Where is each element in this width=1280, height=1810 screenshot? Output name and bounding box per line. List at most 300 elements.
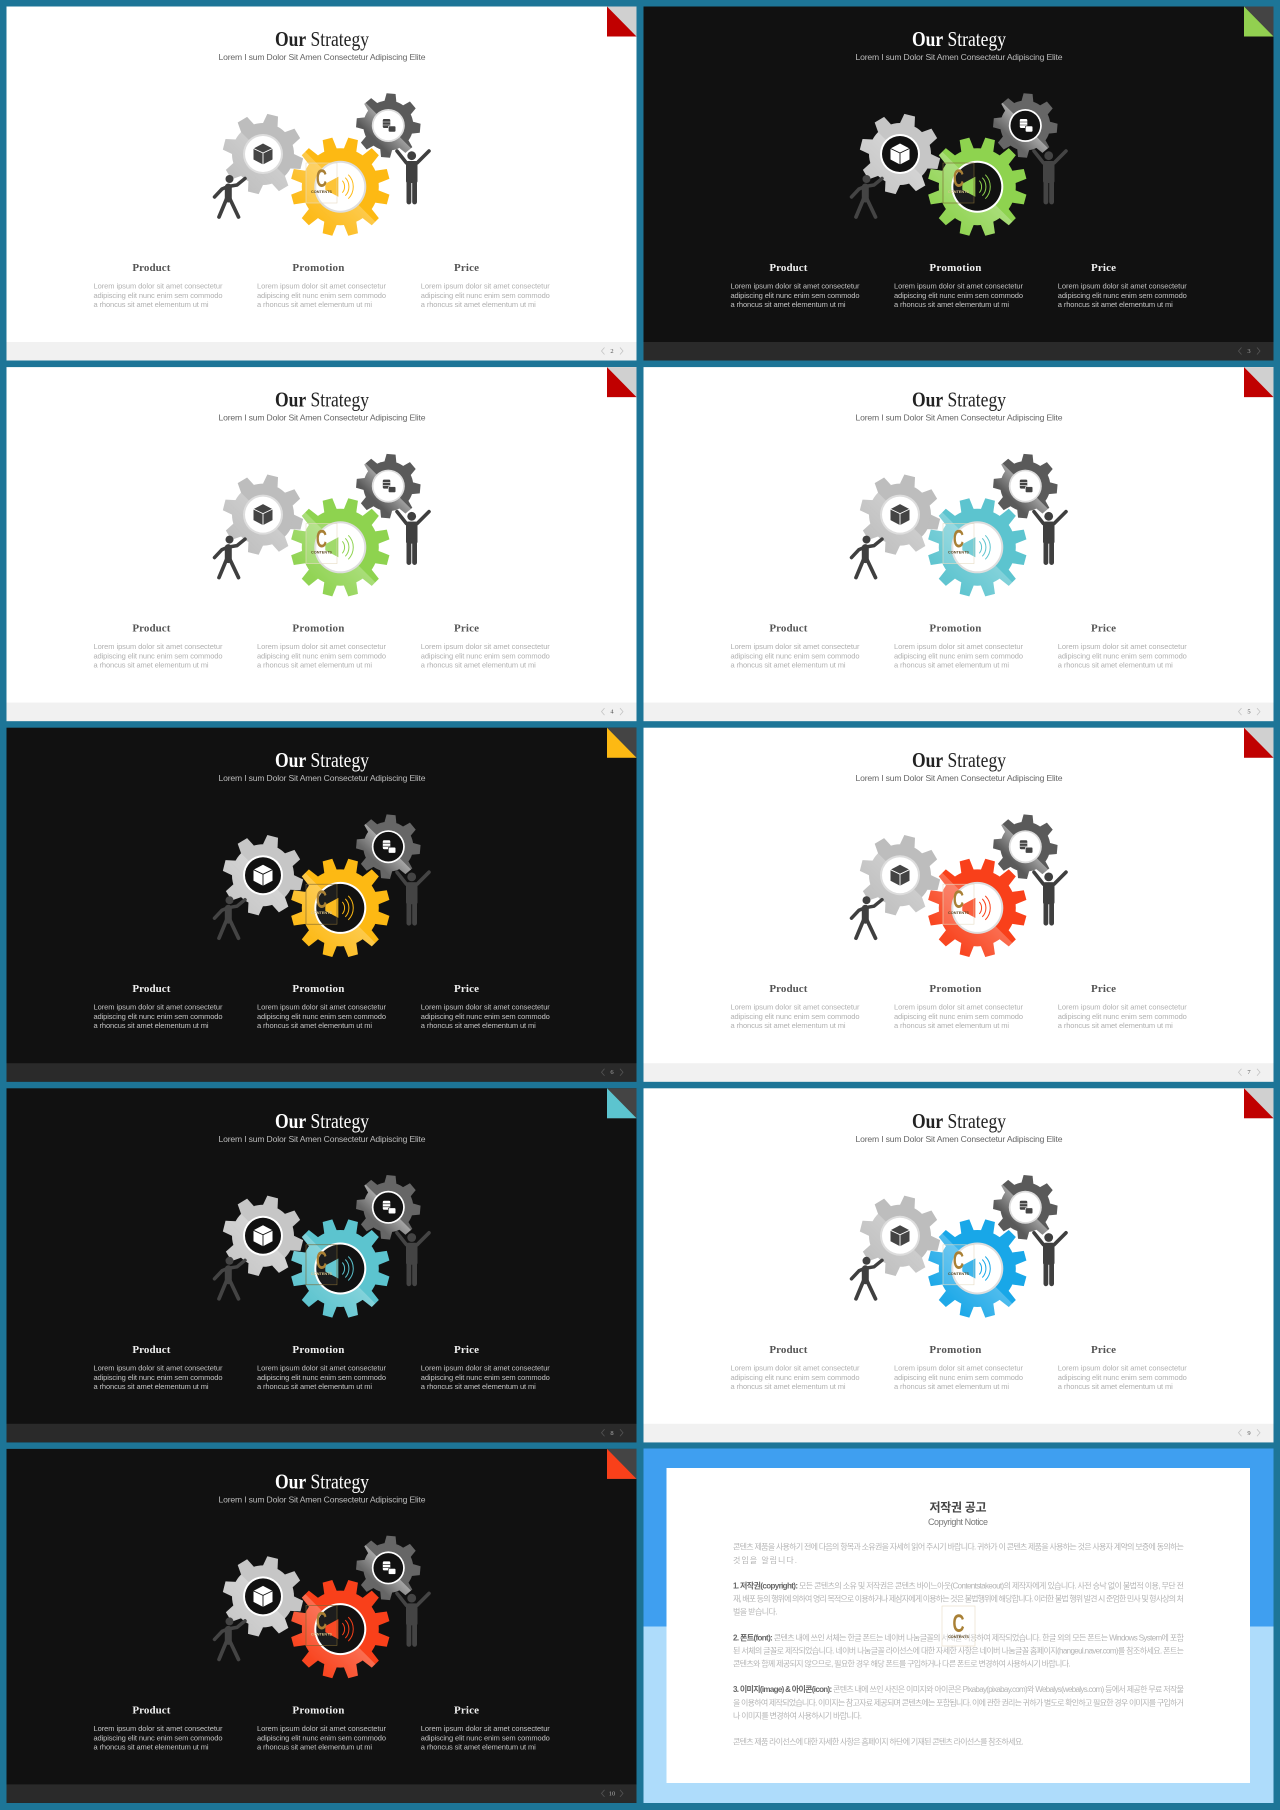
gear illustration	[845, 802, 1070, 963]
gear: price	[343, 80, 433, 170]
background blue top	[644, 1448, 1274, 1626]
panel: slide 4 white green	[6, 367, 636, 721]
column: promotion: adipiscing elit nunc enim sem commodo	[257, 1733, 386, 1742]
title: Our Strategy	[912, 1109, 1006, 1133]
panel: slide 3 dark green	[644, 6, 1274, 360]
column: product	[94, 623, 223, 670]
column: promotion: Promotion	[292, 262, 344, 274]
column: promotion: adipiscing elit nunc enim sem commodo	[894, 291, 1023, 300]
page number: 4	[610, 709, 614, 716]
person left	[852, 536, 882, 578]
column: price: adipiscing elit nunc enim sem commodo	[421, 291, 550, 300]
column: promotion: Lorem ipsum dolor sit amet consectetur	[257, 1003, 386, 1012]
column: price	[421, 262, 550, 309]
column: promotion: a rhoncus sit amet elementum ut mi	[894, 1382, 1009, 1391]
notice section 2: 2. 폰트(font): 콘텐츠 내에 쓰인 서체는 한글 폰트는 네이버 나눔글꼴의 서체를 이용하여 제작되었습니다. 한글 외의 모든 폰트는 Windows System에 포함	[733, 1632, 1185, 1642]
slide background	[6, 1449, 636, 1803]
slide background	[6, 1088, 636, 1442]
column: promotion: a rhoncus sit amet elementum ut mi	[257, 661, 372, 670]
column: price: adipiscing elit nunc enim sem commodo	[1058, 291, 1187, 300]
notice section 2: 된 서체의 글꼴로 제작되었습니다. 네이버 나눔글꼴 라이선스에 대한 자세한 사항은 네이버 나눔글꼴 홈페이지(hangeul.naver.com)를 참조하세요. 폰트는	[733, 1646, 1184, 1656]
watermark: CONTENTS	[948, 911, 969, 915]
corner fold	[1244, 6, 1274, 36]
notice intro	[733, 1542, 1184, 1565]
column: product: Lorem ipsum dolor sit amet consectetur	[730, 1003, 860, 1012]
column: product: Product	[132, 1704, 171, 1716]
column: product: Product	[132, 623, 171, 635]
watermark: C	[953, 165, 964, 193]
watermark: CONTENTS	[311, 1632, 332, 1636]
gear illustration	[208, 80, 433, 242]
notice section 1	[733, 1580, 1184, 1616]
gear: product	[845, 460, 955, 570]
column: price: adipiscing elit nunc enim sem commodo	[1058, 1012, 1187, 1021]
watermark: C	[953, 526, 964, 554]
panel: slide 8 dark teal	[6, 1088, 636, 1442]
column: price: adipiscing elit nunc enim sem commodo	[421, 1373, 550, 1382]
watermark	[306, 1245, 337, 1285]
footer bar	[6, 1784, 636, 1803]
subtitle: Lorem I sum Dolor Sit Amen Consectetur Adipiscing Elite	[856, 1134, 1063, 1144]
column: price: Lorem ipsum dolor sit amet consectetur	[1058, 1003, 1187, 1012]
watermark: CONTENTS	[948, 1272, 969, 1276]
column: product: a rhoncus sit amet elementum ut mi	[94, 300, 209, 309]
watermark: CONTENTS	[948, 190, 969, 194]
notice section 3: 3. 이미지(image) & 아이콘(icon): 콘텐츠 내에 쓰인 사진은 이미지와 아이콘은 Pixabay(pixabay.com)와 Webalys(webalys.com) 등에서 제공한 무료 저작물	[733, 1684, 1184, 1694]
column: promotion: Promotion	[929, 262, 981, 274]
notice section 1: 벌을 받습니다.	[733, 1606, 778, 1616]
column: price	[421, 1344, 550, 1391]
column: price: Price	[454, 1704, 479, 1716]
gear: promotion	[922, 853, 1032, 963]
slide background	[644, 728, 1274, 1082]
column: price: adipiscing elit nunc enim sem commodo	[421, 652, 550, 661]
page number	[602, 1069, 623, 1076]
column: product: Product	[769, 262, 808, 274]
footer bar	[644, 703, 1274, 721]
watermark	[306, 163, 337, 203]
person left	[214, 175, 245, 217]
slide background	[644, 367, 1274, 721]
column: promotion: adipiscing elit nunc enim sem commodo	[894, 1373, 1023, 1382]
column: price: Price	[1091, 983, 1116, 995]
column: price: Lorem ipsum dolor sit amet consectetur	[421, 1003, 550, 1012]
column: promotion	[257, 1704, 386, 1751]
title: Our Strategy	[275, 27, 369, 51]
column: price: a rhoncus sit amet elementum ut mi	[421, 1382, 536, 1391]
gear: product	[845, 99, 955, 209]
column: promotion	[894, 983, 1024, 1030]
title: Our Strategy	[275, 388, 369, 412]
column: promotion: a rhoncus sit amet elementum ut mi	[257, 1382, 372, 1391]
watermark	[306, 524, 337, 564]
column: product: a rhoncus sit amet elementum ut mi	[730, 1021, 846, 1030]
gear: price	[980, 1162, 1070, 1252]
corner fold	[607, 367, 636, 397]
watermark	[942, 1606, 975, 1646]
column: product: adipiscing elit nunc enim sem commodo	[730, 652, 860, 661]
column: price	[1058, 623, 1187, 670]
corner fold	[1244, 728, 1274, 758]
page number	[602, 1429, 623, 1437]
column: price: Price	[1091, 623, 1116, 635]
column: promotion	[257, 262, 386, 309]
column: promotion: a rhoncus sit amet elementum ut mi	[894, 300, 1009, 309]
column: promotion: adipiscing elit nunc enim sem commodo	[894, 1012, 1023, 1021]
background light blue bottom	[644, 1626, 1274, 1803]
column: product	[94, 1704, 223, 1751]
page number: 7	[1247, 1069, 1251, 1076]
panel: slide 6 dark yellow	[6, 728, 636, 1082]
column: promotion	[894, 262, 1024, 309]
page number	[1238, 1429, 1260, 1437]
column: promotion: a rhoncus sit amet elementum ut mi	[894, 661, 1009, 670]
column: price: Price	[454, 983, 479, 995]
column: product: Product	[769, 983, 808, 995]
column: product: a rhoncus sit amet elementum ut mi	[94, 1021, 209, 1030]
column: promotion: adipiscing elit nunc enim sem commodo	[257, 1012, 386, 1021]
subtitle: Lorem I sum Dolor Sit Amen Consectetur Adipiscing Elite	[856, 413, 1063, 423]
corner fold	[607, 728, 636, 758]
gear: price	[343, 1523, 433, 1613]
column: price: Price	[454, 623, 479, 635]
column: price: Lorem ipsum dolor sit amet consectetur	[1058, 282, 1187, 290]
panel: slide 5 white teal	[644, 367, 1274, 721]
notice subtitle: Copyright Notice	[928, 1517, 988, 1527]
watermark: C	[316, 1607, 327, 1635]
column: promotion: Promotion	[292, 1704, 344, 1716]
page number	[602, 1790, 623, 1797]
column: product: adipiscing elit nunc enim sem commodo	[730, 1373, 860, 1382]
gear: price	[980, 441, 1070, 531]
title: Our Strategy	[912, 748, 1006, 772]
watermark: C	[953, 886, 964, 914]
watermark: C	[952, 1610, 964, 1638]
column: promotion: Lorem ipsum dolor sit amet consectetur	[894, 1003, 1024, 1012]
column: product	[94, 983, 223, 1030]
column: price: a rhoncus sit amet elementum ut mi	[421, 1742, 536, 1751]
watermark: CONTENTS	[311, 911, 332, 915]
column: promotion: Promotion	[292, 623, 344, 635]
column: product: a rhoncus sit amet elementum ut mi	[94, 661, 209, 670]
footer bar	[644, 1424, 1274, 1442]
subtitle: Lorem I sum Dolor Sit Amen Consectetur Adipiscing Elite	[218, 52, 426, 62]
column: price: a rhoncus sit amet elementum ut mi	[1058, 300, 1173, 309]
watermark	[943, 163, 974, 203]
watermark: CONTENTS	[311, 551, 332, 555]
column: price: Price	[454, 1344, 479, 1356]
column: promotion	[894, 623, 1024, 670]
column: product: adipiscing elit nunc enim sem commodo	[94, 291, 222, 300]
person right	[1034, 1233, 1066, 1284]
column: price: adipiscing elit nunc enim sem commodo	[421, 1012, 550, 1021]
column: price	[1058, 1344, 1187, 1391]
corner fold	[607, 1088, 636, 1118]
column: promotion: Lorem ipsum dolor sit amet consectetur	[894, 1363, 1024, 1372]
page number	[1238, 708, 1260, 716]
column: price: Lorem ipsum dolor sit amet consectetur	[1058, 1363, 1187, 1372]
column: promotion: a rhoncus sit amet elementum ut mi	[257, 300, 372, 309]
column: product: adipiscing elit nunc enim sem commodo	[94, 1373, 222, 1382]
column: price	[1058, 983, 1187, 1030]
subtitle: Lorem I sum Dolor Sit Amen Consectetur Adipiscing Elite	[218, 773, 426, 783]
notice section 2	[733, 1632, 1185, 1668]
column: promotion: Lorem ipsum dolor sit amet consectetur	[257, 642, 386, 651]
column: promotion: Lorem ipsum dolor sit amet consectetur	[894, 282, 1024, 290]
column: price: Lorem ipsum dolor sit amet consectetur	[421, 642, 550, 651]
gear: product	[208, 1541, 318, 1651]
notice section 1: 1. 저작권(copyright): 모든 콘텐츠의 소유 및 저작권은 콘텐츠 바이느아웃(Contentstakeout)의 제작자에게 있습니다. 사전 승낙 없이 불법적 이용, 무단 전	[733, 1580, 1184, 1590]
column: promotion	[894, 1344, 1024, 1391]
column: product: Product	[132, 262, 171, 274]
gear illustration	[208, 802, 433, 963]
column: promotion	[257, 623, 386, 670]
column: price: adipiscing elit nunc enim sem commodo	[421, 1733, 550, 1742]
column: promotion: adipiscing elit nunc enim sem commodo	[257, 1373, 386, 1382]
column: price: Lorem ipsum dolor sit amet consectetur	[421, 1724, 550, 1733]
watermark	[306, 1605, 337, 1645]
gear illustration	[208, 441, 433, 602]
title: Our Strategy	[275, 1109, 369, 1133]
page number: 10	[609, 1790, 615, 1797]
column: product	[730, 983, 860, 1030]
gear illustration	[845, 441, 1070, 602]
person left	[852, 896, 882, 938]
column: product: Lorem ipsum dolor sit amet consectetur	[730, 282, 860, 290]
column: price: a rhoncus sit amet elementum ut mi	[1058, 1382, 1173, 1391]
column: product: adipiscing elit nunc enim sem commodo	[94, 652, 222, 661]
column: price: a rhoncus sit amet elementum ut mi	[1058, 1021, 1173, 1030]
notice section 3: 을 이용하여 제작되었습니다. 이미지는 참고자료 제공되며 콘텐츠에는 포함됩니다. 이에 관한 권리는 귀하가 별도로 확인하고 필요한 경우 이미지를 구입하거	[733, 1698, 1184, 1708]
column: promotion: adipiscing elit nunc enim sem commodo	[257, 652, 386, 661]
person left	[214, 1257, 245, 1299]
subtitle: Lorem I sum Dolor Sit Amen Consectetur Adipiscing Elite	[856, 773, 1063, 783]
watermark: C	[316, 526, 327, 554]
corner fold	[1244, 1088, 1274, 1118]
page number: 9	[1247, 1430, 1251, 1437]
watermark	[943, 884, 974, 924]
column: product: adipiscing elit nunc enim sem commodo	[94, 1733, 222, 1742]
column: product: Lorem ipsum dolor sit amet consectetur	[94, 1363, 223, 1372]
column: product: adipiscing elit nunc enim sem commodo	[730, 291, 860, 300]
gear: price	[343, 1162, 433, 1252]
subtitle: Lorem I sum Dolor Sit Amen Consectetur Adipiscing Elite	[218, 413, 426, 423]
watermark: C	[316, 1247, 327, 1275]
column: product: Product	[769, 1344, 808, 1356]
column: product: Lorem ipsum dolor sit amet consectetur	[730, 642, 860, 651]
column: promotion: a rhoncus sit amet elementum ut mi	[257, 1742, 372, 1751]
gear: product	[208, 820, 318, 930]
notice closing line: 콘텐츠 제품 라이선스에 대한 자세한 사항은 홈페이지 하단에 기재된 콘텐츠 라이선스를 참조하세요.	[733, 1736, 1024, 1746]
slide background	[644, 1088, 1274, 1442]
column: product: Product	[769, 623, 808, 635]
gear: promotion	[285, 132, 395, 242]
gear: promotion	[922, 132, 1032, 242]
person right	[1034, 512, 1066, 563]
watermark: CONTENTS	[311, 190, 332, 194]
column: product: Lorem ipsum dolor sit amet consectetur	[94, 1003, 223, 1012]
panel: slide 10 dark red-orange	[6, 1449, 636, 1803]
footer bar	[644, 342, 1274, 360]
person right	[397, 512, 429, 563]
column: promotion: Lorem ipsum dolor sit amet consectetur	[257, 1363, 386, 1372]
notice title: 저작권 공고	[930, 1500, 986, 1514]
column: price	[421, 623, 550, 670]
column: product	[730, 1344, 860, 1391]
column: product: Product	[132, 983, 171, 995]
column: product: Lorem ipsum dolor sit amet consectetur	[94, 642, 223, 651]
watermark: CONTENTS	[311, 1272, 332, 1276]
gear: product	[208, 460, 318, 570]
gear illustration	[208, 1523, 433, 1684]
column: product: a rhoncus sit amet elementum ut mi	[730, 300, 846, 309]
person left	[214, 1617, 245, 1659]
title: Our Strategy	[912, 388, 1006, 412]
corner fold	[1244, 367, 1274, 397]
column: price: Price	[1091, 262, 1116, 274]
footer bar	[6, 342, 636, 360]
column: product: adipiscing elit nunc enim sem commodo	[730, 1012, 860, 1021]
column: product: adipiscing elit nunc enim sem commodo	[94, 1012, 222, 1021]
page number	[602, 348, 623, 355]
footer bar	[6, 703, 636, 721]
panel: slide 7 white orange	[644, 728, 1274, 1082]
gear: price	[980, 80, 1070, 170]
column: promotion: a rhoncus sit amet elementum ut mi	[257, 1021, 372, 1030]
column: promotion: Lorem ipsum dolor sit amet consectetur	[894, 642, 1024, 651]
corner fold	[607, 6, 636, 36]
column: product	[94, 262, 223, 309]
column: product: a rhoncus sit amet elementum ut mi	[730, 661, 846, 670]
person left	[852, 175, 882, 217]
column: product	[94, 1344, 223, 1391]
gear: product	[845, 1181, 955, 1291]
slide background	[644, 6, 1274, 360]
white card	[666, 1468, 1250, 1783]
column: promotion: Promotion	[929, 1344, 981, 1356]
gear: promotion	[285, 1574, 395, 1684]
column: product: Lorem ipsum dolor sit amet consectetur	[94, 1724, 223, 1733]
column: price: a rhoncus sit amet elementum ut mi	[421, 661, 536, 670]
page number: 5	[1247, 709, 1251, 716]
column: promotion: Promotion	[292, 1344, 344, 1356]
column: promotion: adipiscing elit nunc enim sem commodo	[257, 291, 386, 300]
column: product	[730, 623, 860, 670]
title: Our Strategy	[912, 27, 1006, 51]
footer bar	[644, 1063, 1274, 1082]
person right	[1034, 151, 1066, 202]
gear: price	[343, 802, 433, 892]
column: promotion: adipiscing elit nunc enim sem commodo	[894, 652, 1023, 661]
gear: promotion	[922, 1214, 1032, 1324]
column: price: Lorem ipsum dolor sit amet consectetur	[1058, 642, 1187, 651]
person right	[397, 872, 429, 923]
page number: 3	[1247, 348, 1251, 355]
column: price: a rhoncus sit amet elementum ut mi	[421, 1021, 536, 1030]
notice intro: 것임을 알립니다.	[733, 1555, 797, 1565]
column: price: Price	[454, 262, 479, 274]
slide background	[6, 728, 636, 1082]
person left	[214, 536, 245, 578]
watermark	[943, 524, 974, 564]
watermark: CONTENTS	[948, 551, 969, 555]
column: promotion: Lorem ipsum dolor sit amet consectetur	[257, 282, 386, 290]
gear: promotion	[922, 492, 1032, 602]
watermark: C	[316, 165, 327, 193]
column: promotion: Promotion	[292, 983, 344, 995]
gear: promotion	[285, 853, 395, 963]
page number: 2	[610, 348, 614, 355]
column: price: adipiscing elit nunc enim sem commodo	[1058, 652, 1187, 661]
column: product: a rhoncus sit amet elementum ut mi	[94, 1742, 209, 1751]
page number	[602, 708, 623, 716]
watermark: C	[316, 886, 327, 914]
column: promotion	[257, 983, 386, 1030]
person right	[397, 1593, 429, 1644]
gear: product	[208, 99, 318, 209]
watermark: CONTENTS	[948, 1635, 969, 1639]
panel: copyright notice	[644, 1448, 1274, 1803]
column: promotion: Promotion	[929, 983, 981, 995]
gear illustration	[845, 1162, 1070, 1324]
corner fold	[607, 1449, 636, 1479]
title: Our Strategy	[275, 748, 369, 772]
notice intro: 콘텐츠 제품을 사용하기 전에 다음의 항목과 소유권을 자세히 읽어 주시기 바랍니다. 귀하가 이 콘텐츠 제품을 사용하는 것은 사용자 계약의 보증에 동의하는	[733, 1542, 1184, 1552]
notice section 3	[733, 1684, 1184, 1720]
column: price: Price	[1091, 1344, 1116, 1356]
notice section 1: 재, 배포 등의 행위에 의하여 영리 목적으로 이용하거나 제삼자에게 이용하는 것은 불법행위에 해당합니다. 이러한 불법 행위 발견 시 준엄한 민사 및 형사상의 처	[733, 1594, 1184, 1604]
watermark	[306, 884, 337, 924]
watermark: C	[953, 1247, 964, 1275]
page number: 6	[610, 1069, 614, 1076]
footer bar	[6, 1424, 636, 1442]
column: product: a rhoncus sit amet elementum ut mi	[730, 1382, 846, 1391]
person right	[1034, 872, 1066, 923]
page number	[1238, 1069, 1260, 1076]
gear illustration	[208, 1162, 433, 1324]
column: promotion: Lorem ipsum dolor sit amet consectetur	[257, 1724, 386, 1733]
column: price: a rhoncus sit amet elementum ut mi	[421, 300, 536, 309]
subtitle: Lorem I sum Dolor Sit Amen Consectetur Adipiscing Elite	[218, 1494, 426, 1504]
page number	[1238, 348, 1260, 355]
panel: slide 2 white yellow	[6, 6, 636, 360]
person right	[397, 1233, 429, 1284]
footer bar	[6, 1063, 636, 1082]
column: product: Lorem ipsum dolor sit amet consectetur	[730, 1363, 860, 1372]
person right	[397, 151, 429, 202]
subtitle: Lorem I sum Dolor Sit Amen Consectetur Adipiscing Elite	[218, 1134, 426, 1144]
column: price	[421, 983, 550, 1030]
page number: 8	[610, 1430, 614, 1437]
notice section 2: 콘텐츠와 함께 제공되지 않으므로, 필요한 경우 해당 폰트를 구입하거나 다른 폰트로 변경하여 사용하시기 바랍니다.	[733, 1658, 1071, 1668]
gear: product	[208, 1181, 318, 1291]
watermark	[943, 1245, 974, 1285]
notice section 3: 나 이미지를 변경하여 사용하시기 바랍니다.	[733, 1710, 862, 1720]
gear illustration	[845, 80, 1070, 242]
column: promotion: a rhoncus sit amet elementum ut mi	[894, 1021, 1009, 1030]
panel: slide 9 white blue	[644, 1088, 1274, 1442]
column: price: Lorem ipsum dolor sit amet consectetur	[421, 1363, 550, 1372]
slide background	[6, 6, 636, 360]
column: price: a rhoncus sit amet elementum ut mi	[1058, 661, 1173, 670]
column: promotion	[257, 1344, 386, 1391]
column: price	[1058, 262, 1187, 309]
column: price: adipiscing elit nunc enim sem commodo	[1058, 1373, 1187, 1382]
column: product: a rhoncus sit amet elementum ut mi	[94, 1382, 209, 1391]
column: promotion: Promotion	[929, 623, 981, 635]
person left	[214, 896, 245, 938]
gear: product	[845, 820, 955, 930]
